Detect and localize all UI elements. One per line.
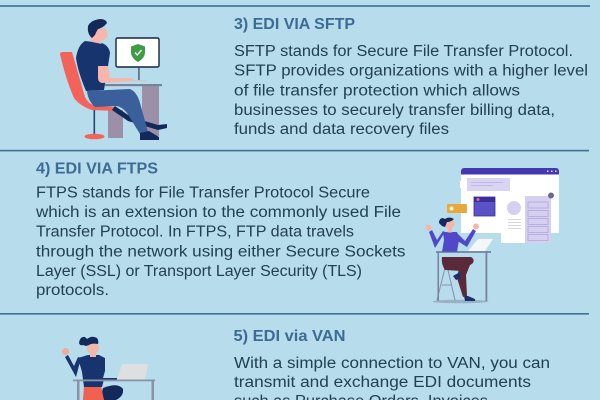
text block: SFTP description bbox=[234, 43, 588, 138]
text block: VAN description: transmit and exchange EDI documents bbox=[234, 374, 531, 391]
icon: green security shield bbox=[131, 44, 145, 62]
text block: SFTP description: of file transfer protection which allows bbox=[234, 82, 520, 99]
text block: SFTP description: businesses to securely transfer billing data, bbox=[234, 102, 555, 119]
panel: EDI via SFTP bbox=[60, 16, 588, 140]
heading: 5) EDI via VAN: 5) EDI via VAN bbox=[234, 328, 346, 345]
heading: 3) EDI VIA SFTP: 3) EDI VIA SFTP bbox=[234, 16, 355, 33]
heading: 4) EDI VIA FTPS: 4) EDI VIA FTPS bbox=[36, 160, 158, 178]
text block: VAN description bbox=[234, 355, 550, 400]
text block: FTPS description: protocols. bbox=[36, 282, 109, 299]
illustration: woman waving at laptop bbox=[62, 337, 155, 400]
panel: EDI via FTPS bbox=[35, 160, 559, 303]
text block: VAN description: With a simple connection to VAN, you can bbox=[234, 355, 550, 372]
illustration: woman at desk with browser window bbox=[426, 168, 559, 303]
text block: SFTP description: funds and data recovery files bbox=[234, 121, 449, 138]
text block: FTPS description bbox=[35, 184, 406, 299]
text block: FTPS description: Layer (SSL) or Transport Layer Security (TLS) bbox=[36, 263, 362, 280]
text block: FTPS description: Transfer Protocol. In FTPS, FTP data travels bbox=[36, 224, 354, 241]
text block: FTPS description: FTPS stands for File Transfer Protocol Secure bbox=[36, 184, 370, 201]
text block: FTPS description: through the network using either Secure Sockets bbox=[36, 243, 406, 260]
text block: SFTP description: SFTP provides organizations with a higher level bbox=[234, 63, 588, 80]
text block: SFTP description: SFTP stands for Secure File Transfer Protocol. bbox=[234, 43, 573, 60]
illustration: man at desk with secure monitor bbox=[60, 19, 167, 140]
text block: FTPS description: which is an extension to the commonly used File bbox=[35, 204, 401, 221]
panel: EDI via VAN bbox=[62, 328, 550, 400]
